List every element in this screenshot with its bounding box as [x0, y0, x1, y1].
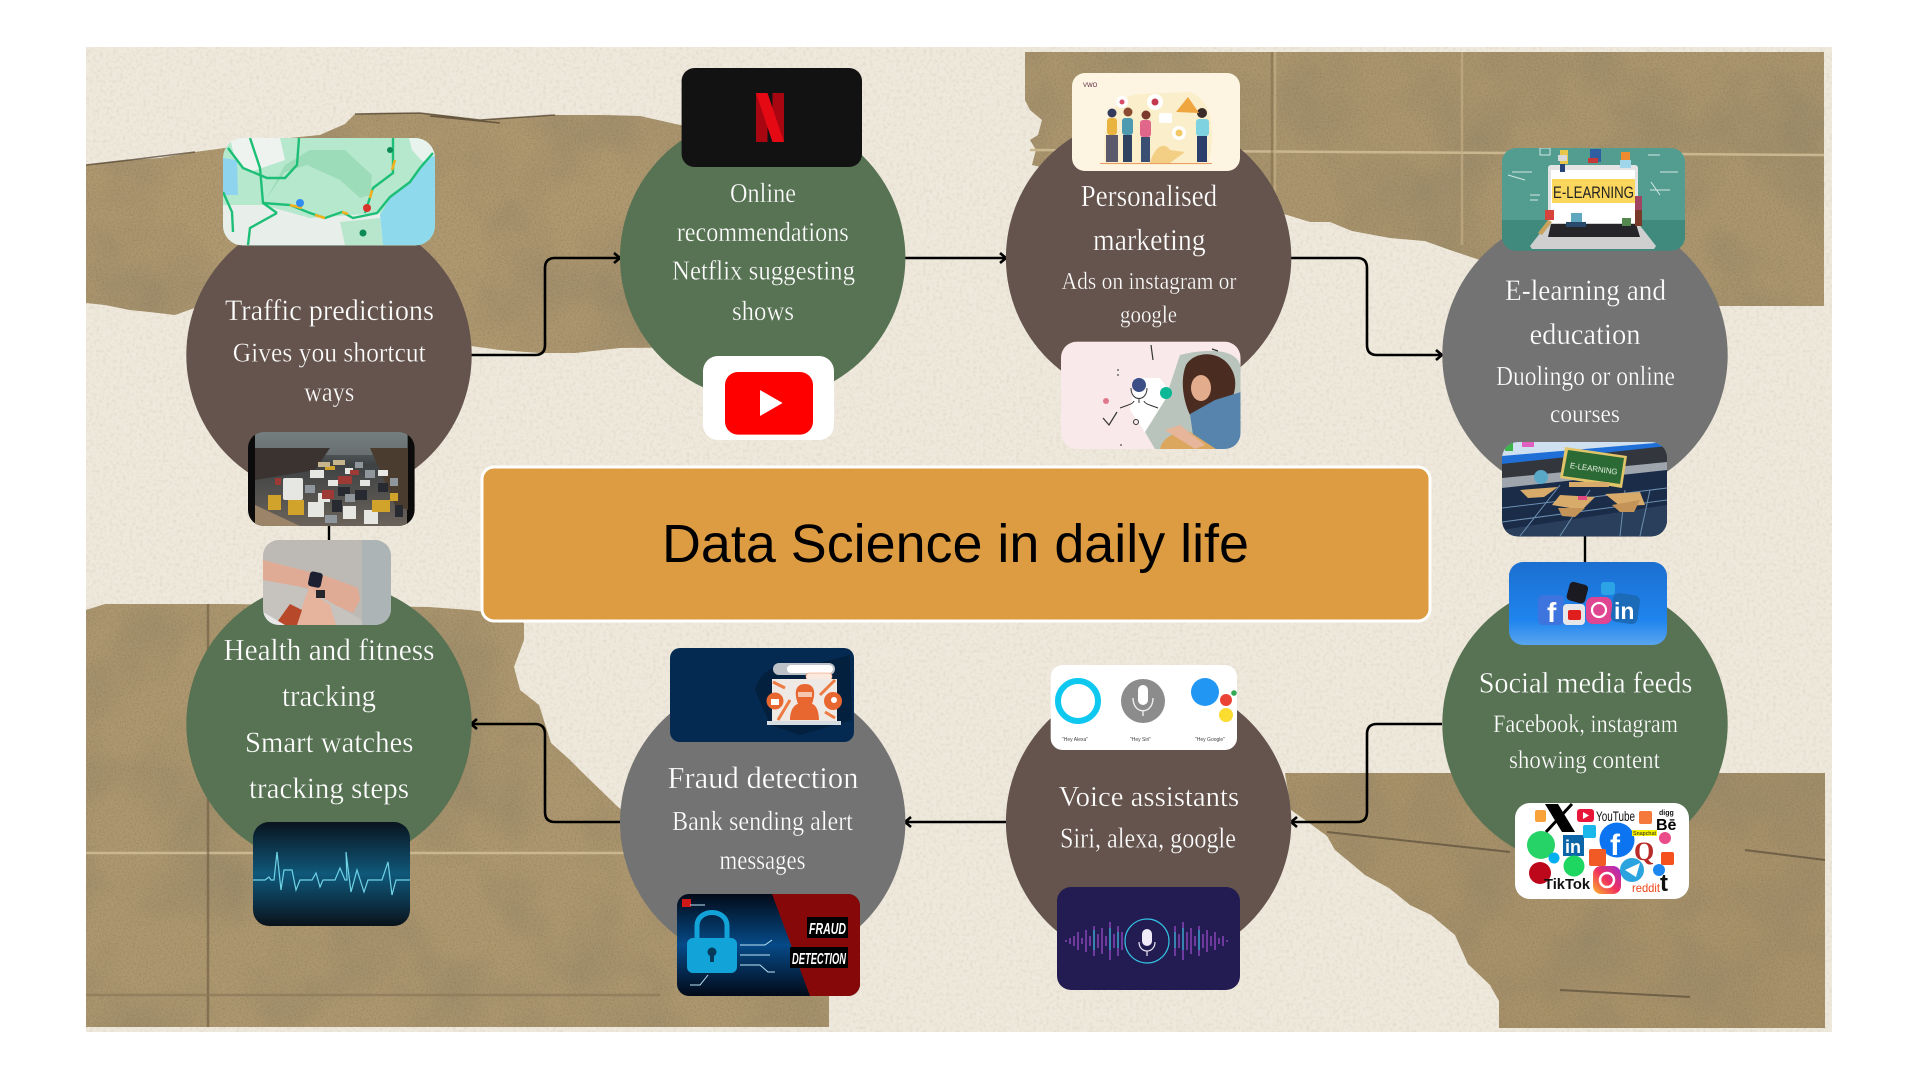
title banner: [482, 467, 1430, 621]
image: social media logo collage: in: [1565, 837, 1581, 857]
image: heartbeat monitor: [253, 822, 410, 926]
panel: social media feeds: showing content: [1509, 747, 1660, 774]
panel: personalised marketing: Personalised: [1081, 178, 1218, 213]
panel: online recommendations: shows: [732, 296, 794, 326]
image: traffic map: [223, 138, 435, 246]
image: e-learning keyboard classroom: E-LEARNING: [1569, 461, 1618, 477]
image: social media logo collage: TikTok: [1544, 876, 1591, 893]
panel: online recommendations: Online: [730, 178, 796, 208]
torn cardboard: top right: [1025, 52, 1824, 306]
image: voice assistant logos: [1051, 665, 1237, 750]
cardboard folds: top right: [1030, 52, 1824, 245]
image: fraud hacker illustration: [670, 648, 854, 742]
image: voice assistant logos: "Hey Alexa": [1062, 737, 1088, 743]
panel: health and fitness tracking: tracking steps: [249, 772, 409, 805]
panel: voice assistants: [1006, 679, 1291, 965]
image: social media cubes: in: [1614, 598, 1634, 624]
panel: online recommendations: Netflix suggesting: [672, 256, 855, 286]
panel: personalised marketing: marketing: [1093, 222, 1206, 257]
image: social media logo collage: [1515, 803, 1689, 899]
panel: e-learning and education: E-learning and: [1505, 274, 1666, 307]
arrow: traffic to recommendations: [471, 253, 620, 355]
arrow: recommendations to marketing: [905, 253, 1006, 263]
arrows connecting steps: [471, 253, 1442, 827]
panel: traffic predictions: ways: [304, 377, 354, 407]
connector: e-learning to social media: [1584, 530, 1586, 568]
image: smart watch photo: [263, 540, 391, 625]
torn cardboard: top left: [86, 113, 850, 353]
panel: traffic predictions: [186, 212, 472, 498]
connector: traffic to health: [328, 520, 330, 546]
image: social media logo collage: Snapchat: [1633, 831, 1657, 837]
image: personalised ads illustration: [1061, 342, 1241, 450]
torn edge highlight: [86, 113, 555, 165]
panel: personalised marketing: [1006, 115, 1291, 401]
panel: online recommendations: [620, 115, 905, 400]
panel: online recommendations: recommendations: [677, 217, 849, 247]
image: fraud detection banner: DETECTION: [792, 951, 846, 968]
arrow: voice assistants to fraud detection: [905, 817, 1006, 827]
image: social media logo collage: Bē: [1656, 817, 1677, 834]
torn cardboard: bottom right: [1285, 773, 1825, 1028]
image: social media logo collage: f: [1610, 829, 1621, 862]
cardboard creases: bottom right: [1327, 832, 1825, 997]
panel: health and fitness tracking: tracking: [282, 678, 376, 713]
image: social media logo collage: YouTube: [1596, 808, 1635, 824]
image: voice assistant logos: "Hey Google": [1195, 737, 1225, 743]
panel: e-learning and education: Duolingo or online: [1496, 361, 1675, 391]
panel: e-learning and education: [1442, 212, 1728, 498]
cardboard folds: bottom left: [86, 604, 660, 1027]
image: voice assistant logos: "Hey Siri": [1130, 737, 1151, 743]
panel: fraud detection: messages: [720, 845, 806, 875]
arrow: marketing to e-learning: [1291, 258, 1442, 360]
panel: health and fitness tracking: Smart watches: [245, 726, 413, 759]
panel: social media feeds: Facebook, instagram: [1493, 711, 1678, 738]
panel: personalised marketing: google: [1120, 303, 1177, 329]
panel: e-learning and education: courses: [1550, 401, 1620, 428]
image: e-learning laptop illustration: [1502, 148, 1685, 251]
panel: health and fitness tracking: Health and fitness: [224, 632, 434, 667]
image: personalised marketing illustration: [1072, 73, 1240, 171]
image: fraud detection banner: [677, 894, 860, 996]
panel: fraud detection: Fraud detection: [668, 760, 859, 795]
image: voice waveform: [1057, 887, 1240, 990]
image: traffic jam photo: [248, 432, 415, 526]
image: social media logo collage: Q: [1634, 837, 1654, 866]
panel: traffic predictions: Traffic predictions: [225, 294, 434, 327]
image: social media logo collage: reddit: [1632, 881, 1661, 895]
image: social media cubes: [1509, 562, 1667, 645]
arrow: fraud detection to health: [471, 719, 620, 822]
panel: health and fitness tracking: [186, 581, 472, 867]
image: netflix logo card: [682, 68, 862, 167]
image: fraud detection banner: FRAUD: [809, 921, 846, 938]
title banner: Data Science in daily life: [662, 514, 1249, 574]
panel: personalised marketing: Ads on instagram or: [1062, 269, 1237, 295]
image: personalised marketing illustration: VWO: [1083, 83, 1098, 89]
image: youtube logo card: [703, 356, 834, 440]
panel: traffic predictions: Gives you shortcut: [233, 338, 426, 368]
image: social media logo collage: t: [1660, 870, 1668, 897]
arrow: social media to voice assistants: [1291, 724, 1442, 827]
image: social media logo collage: digg: [1659, 810, 1674, 817]
image: social media cubes: f: [1547, 597, 1557, 628]
panel: fraud detection: [620, 679, 905, 965]
panel: voice assistants: Voice assistants: [1059, 781, 1239, 813]
panel: social media feeds: [1442, 581, 1728, 867]
panel: fraud detection: Bank sending alert: [672, 806, 853, 836]
panel: social media feeds: Social media feeds: [1479, 667, 1692, 700]
image: e-learning keyboard classroom: [1502, 442, 1667, 536]
torn cardboard: bottom left: [86, 604, 829, 1027]
image: e-learning laptop illustration: E-LEARNING: [1553, 183, 1634, 202]
panel: e-learning and education: education: [1530, 318, 1640, 351]
panel: voice assistants: Siri, alexa, google: [1060, 824, 1236, 854]
